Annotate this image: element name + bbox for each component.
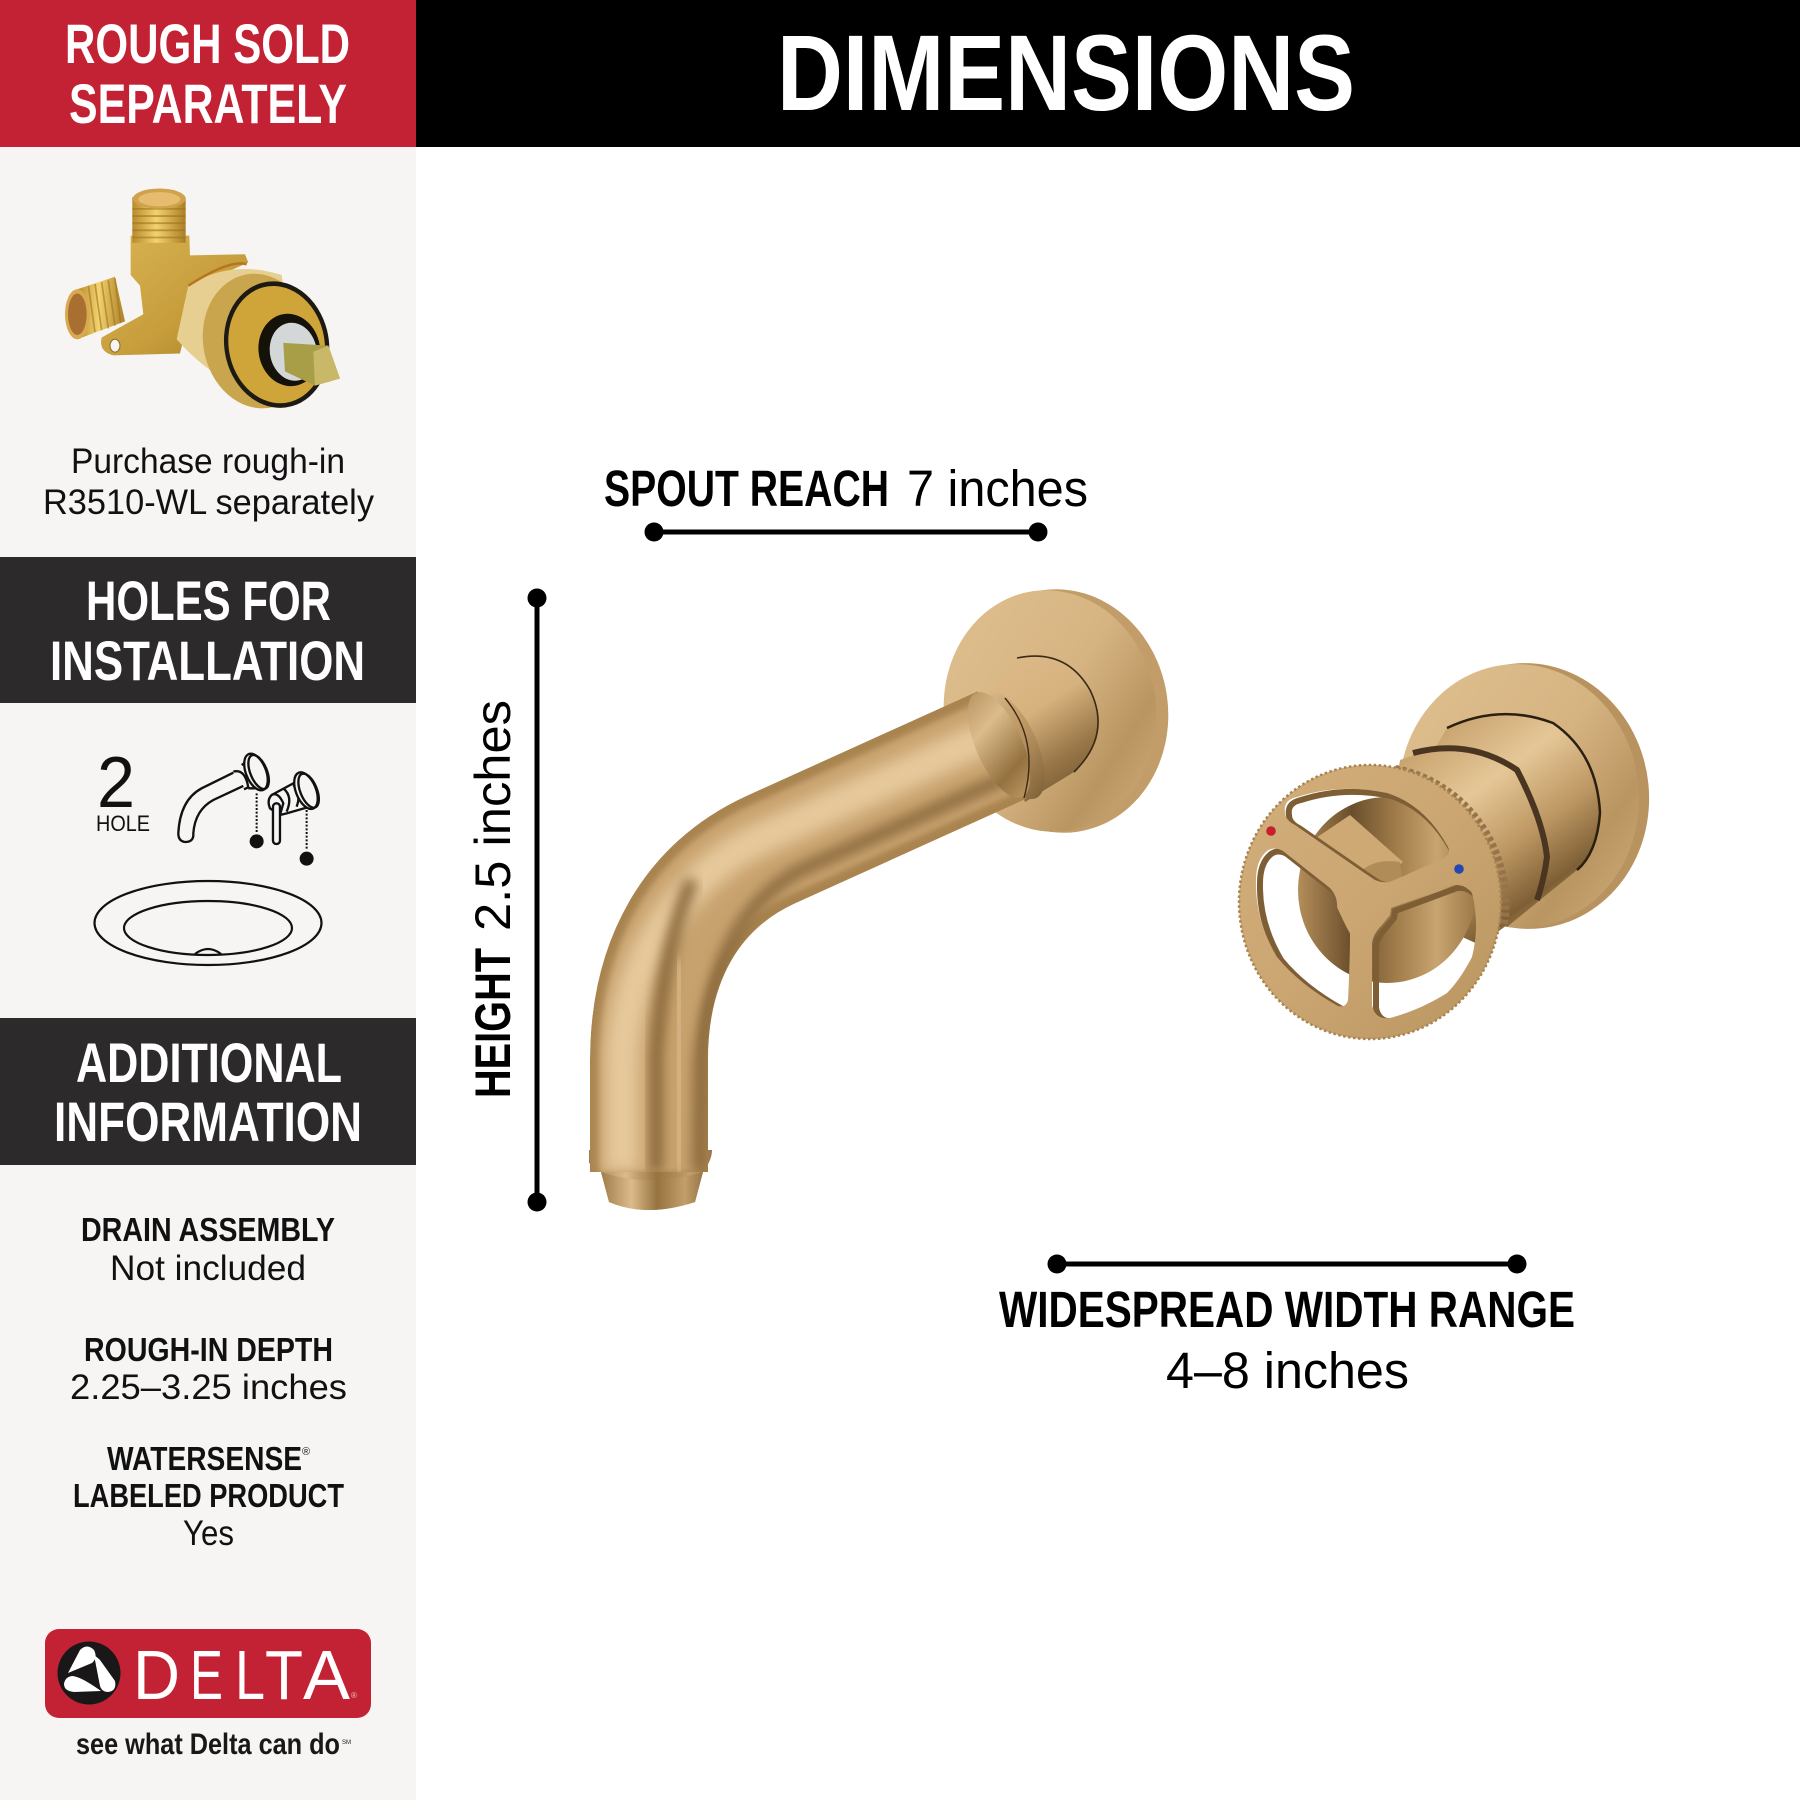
label: height: HEIGHT xyxy=(465,948,521,1098)
icon: sink basin xyxy=(94,881,322,965)
text: drain assembly: Not included xyxy=(110,1249,306,1288)
dimension line: height xyxy=(528,588,546,1212)
logo: delta: A xyxy=(303,1636,350,1714)
heading: additional information: INFORMATION xyxy=(54,1090,362,1153)
text: 2 hole: 2 xyxy=(97,743,135,823)
icon: faucet line art with hole markers xyxy=(178,750,323,866)
text: purchase rough-in: R3510-WL separately xyxy=(43,483,374,522)
panel: left sidebar xyxy=(0,0,416,1800)
product: wheel handle xyxy=(1239,651,1662,1039)
text: 2 hole xyxy=(96,743,150,836)
icon: brass rough-in valve xyxy=(65,189,340,422)
text: drain assembly: DRAIN ASSEMBLY xyxy=(81,1211,335,1248)
text: watersense labeled product: LABELED PRODUCT xyxy=(73,1477,344,1514)
text: tagline: SM xyxy=(342,1740,351,1746)
banner: rough sold separately: ROUGH SOLD xyxy=(65,12,350,75)
label: spout reach: SPOUT REACH xyxy=(604,460,889,517)
heading: holes for installation: HOLES FOR xyxy=(86,569,331,632)
text: watersense labeled product: Yes xyxy=(183,1514,234,1553)
label: height xyxy=(465,700,521,1098)
text: rough-in depth: 2.25–3.25 inches xyxy=(70,1368,347,1407)
label: spout reach: 7 inches xyxy=(907,460,1088,517)
text: drain assembly xyxy=(81,1211,335,1288)
banner: rough sold separately xyxy=(0,0,416,147)
dimension line: widespread width xyxy=(1048,1254,1526,1274)
label: widespread width range: 4–8 inches xyxy=(1166,1342,1409,1399)
product: wall spout xyxy=(589,575,1184,1210)
title banner: dimensions xyxy=(416,0,1800,147)
heading: holes for installation xyxy=(0,557,416,703)
heading: additional information xyxy=(0,1018,416,1165)
label: height: 2.5 inches xyxy=(465,700,521,931)
text: tagline: see what Delta can do xyxy=(76,1728,340,1761)
heading: additional information: ADDITIONAL xyxy=(76,1031,342,1094)
logo: delta: L xyxy=(235,1636,265,1714)
logo: delta: E xyxy=(190,1636,223,1714)
text: purchase rough-in: Purchase rough-in xyxy=(71,442,345,481)
heading: holes for installation: INSTALLATION xyxy=(50,629,365,692)
logo: delta: T xyxy=(265,1636,303,1714)
label: widespread width range xyxy=(999,1281,1575,1399)
logo: delta: ® xyxy=(351,1691,357,1700)
dimension line: spout reach xyxy=(644,522,1048,542)
banner: rough sold separately: SEPARATELY xyxy=(69,72,347,135)
logo: delta xyxy=(45,1629,371,1718)
text: 2 hole: HOLE xyxy=(96,811,150,836)
logo: delta: D xyxy=(133,1636,180,1714)
text: watersense labeled product: WATERSENSE xyxy=(107,1440,302,1477)
text: purchase rough-in xyxy=(43,442,374,522)
text: watersense labeled product xyxy=(73,1440,344,1553)
text: watersense labeled product: ® xyxy=(302,1446,310,1458)
text: rough-in depth: ROUGH-IN DEPTH xyxy=(84,1331,333,1368)
title banner: dimensions: DIMENSIONS xyxy=(777,12,1355,133)
label: widespread width range: WIDESPREAD WIDTH RANGE xyxy=(999,1281,1575,1338)
text: rough-in depth xyxy=(70,1331,347,1407)
